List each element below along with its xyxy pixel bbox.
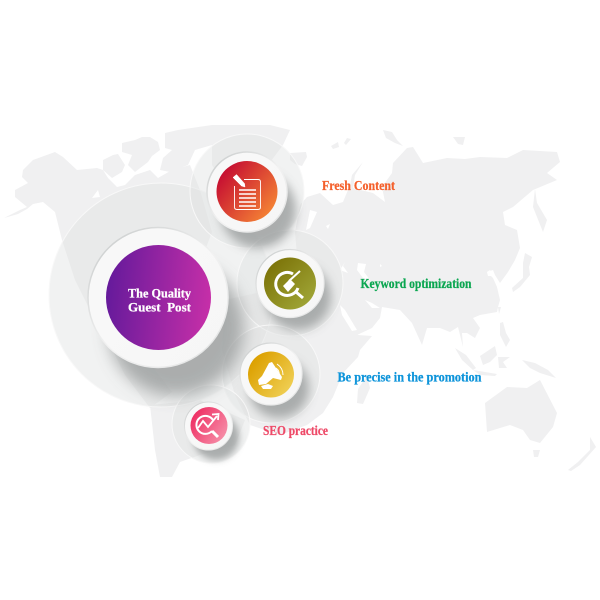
shadow: keyword optimization [265,264,331,330]
icon: megaphone [258,362,283,389]
Arctic Canada islands [103,125,212,178]
main title: The Quality [128,286,191,300]
fresh white ring [207,152,287,232]
label: seo practice: SEO practice [263,423,328,438]
main circle [88,228,228,368]
main purple disc [106,245,211,350]
keyword optimization badge [256,250,472,318]
halo: seo practice [172,385,250,463]
shadow: seo practice [193,414,239,460]
promotion white ring [240,343,302,405]
promotion badge [240,343,482,405]
halo: main circle [49,183,273,407]
main title [128,286,192,314]
label: be precise in the promotion: Be precise in the promotion [338,370,482,386]
fresh gradient disc [216,161,278,222]
South America [150,400,245,477]
promotion gradient disc [248,352,294,398]
icon: document with pencil [233,174,260,210]
keyword white ring [256,250,324,318]
seo white ring [184,402,232,450]
Africa [222,290,372,435]
Arctic Russia islands [331,130,465,149]
seo practice badge [184,402,328,450]
fresh content badge [207,152,395,232]
Kamchatka side island [533,189,547,232]
label: keyword optimization: Keyword optimization [360,277,472,292]
icon: magnifier with trend arrow [196,414,218,437]
main white ring [88,228,228,368]
Tasmania and New Zealand [533,437,596,471]
North America [4,152,212,408]
halo: fresh content [190,134,304,248]
main title: Guest Post [128,300,192,314]
drop shadows [108,172,331,460]
Iceland [290,152,307,166]
shadow: main circle [108,260,244,396]
Japan [512,253,532,292]
halo: keyword optimization [237,230,343,336]
keyword gradient disc [264,258,316,310]
shadow: promotion [249,358,309,418]
icon: magnifier with brush [276,271,303,298]
Australia [485,380,557,443]
Greenland [212,125,290,200]
halo: promotion [222,325,320,423]
halo rings [49,134,343,463]
label: fresh content: Fresh Content [322,179,395,194]
shadow: fresh content [220,172,296,248]
Madagascar [357,376,370,404]
seo gradient disc [190,407,228,444]
Eurasia [295,147,560,347]
white map seas [92,190,494,331]
Indonesia and Philippines [455,307,556,378]
world map [4,125,596,477]
